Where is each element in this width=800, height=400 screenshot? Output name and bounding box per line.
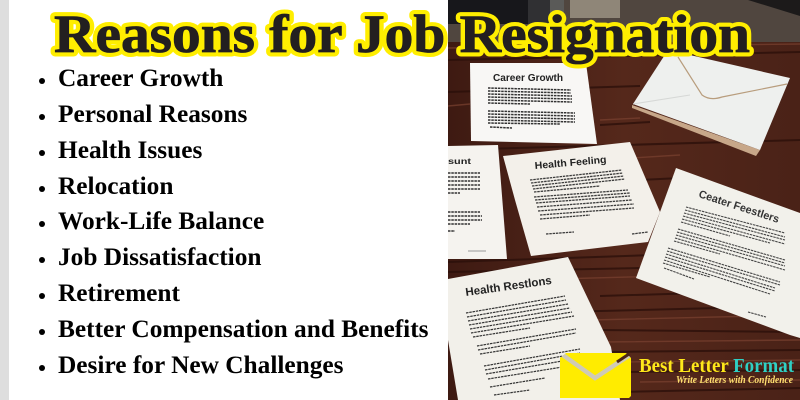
reason 7: Retirement — [58, 279, 181, 307]
paper: Health Feeling — [503, 142, 660, 256]
reason 5: Work-Life Balance — [58, 207, 264, 235]
paper: Health Feeling: Health Feeling — [534, 155, 607, 172]
left panel background — [0, 0, 449, 400]
bullet list: reasons — [39, 64, 429, 379]
paper: Career Feelings — [636, 168, 800, 338]
logo: envelope icon — [560, 353, 631, 398]
title: Reasons for Job Resignation — [54, 4, 750, 64]
paper: Health Reasons — [448, 257, 620, 400]
paper: Career Feelings: Ceater Feestlers — [697, 188, 781, 226]
reason 4: Relocation — [58, 172, 173, 200]
paper: partial left: sunt — [448, 157, 471, 166]
paper: Health Reasons: Health Restlons — [465, 275, 553, 299]
paper: Career Growth — [470, 63, 597, 144]
reason 8: Better Compensation and Benefits — [58, 315, 429, 343]
paper: partial left — [448, 145, 507, 259]
reason 2: Personal Reasons — [58, 100, 248, 128]
title: Reasons for Job Resignation — [54, 4, 750, 64]
paper: Career Growth: Career Growth — [493, 73, 563, 84]
reason 9: Desire for New Challenges — [58, 351, 344, 379]
wood desk surface — [448, 40, 800, 400]
reason 3: Health Issues — [58, 136, 202, 164]
reason 6: Job Dissatisfaction — [58, 243, 261, 271]
envelope — [632, 50, 790, 156]
background: dark wall and plant — [448, 0, 800, 42]
logo: brand name: Best Letter Format — [639, 355, 794, 377]
photo: desk with letters — [448, 0, 800, 400]
reason 1: Career Growth — [58, 64, 223, 92]
